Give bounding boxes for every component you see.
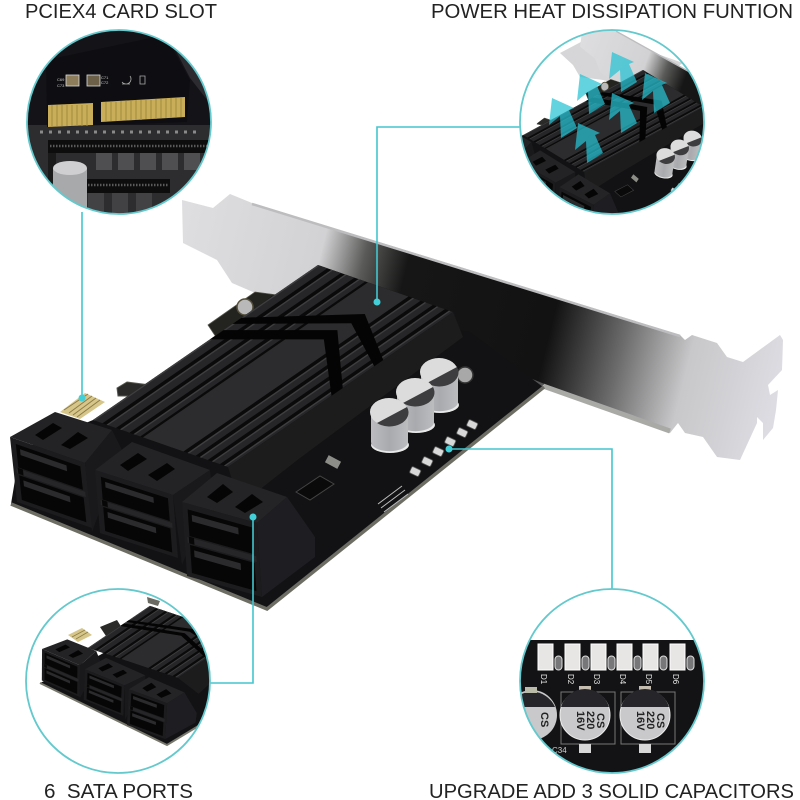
inset rear tab xyxy=(100,620,122,636)
leader line: SATA ports xyxy=(210,514,256,683)
motherboard area xyxy=(28,125,210,213)
capacitor centre: 220 xyxy=(584,711,596,729)
silver capacitor xyxy=(53,161,87,208)
inset board xyxy=(40,653,209,746)
inset circle: PCIe gold fingers xyxy=(26,29,212,215)
capacitor right: 16V xyxy=(634,711,646,731)
small board components xyxy=(296,455,408,512)
leader line: PCIe slot xyxy=(78,212,86,402)
capacitor left: CS xyxy=(538,712,550,727)
diode row D1-D6 xyxy=(538,644,694,685)
capacitor right: CS xyxy=(654,713,666,728)
heatsink xyxy=(93,265,463,505)
inset gold connector xyxy=(68,628,92,642)
LED row xyxy=(409,419,478,477)
inset top tab xyxy=(147,597,160,606)
leader line: heat dissipation xyxy=(374,127,520,306)
capacitor centre: CS xyxy=(594,713,606,728)
capacitor left xyxy=(522,687,557,738)
capacitor centre xyxy=(560,686,615,753)
upper card board xyxy=(47,125,100,127)
diode row D1-D6: D3 xyxy=(592,674,601,685)
capacitor right: 220 xyxy=(644,711,656,729)
surface components strip xyxy=(40,130,200,134)
board label: C34 xyxy=(552,746,567,755)
board mounting tab xyxy=(208,292,285,345)
heading: heat dissipation: POWER HEAT DISSIPATION FUNTION xyxy=(431,1,793,23)
SATA connector block 3 xyxy=(182,473,315,597)
bracket flange behind the card xyxy=(560,42,682,81)
PCIe slots xyxy=(48,140,213,215)
capacitor centre: 16V xyxy=(574,711,586,731)
black fins xyxy=(93,265,453,467)
diode row D1-D6: D6 xyxy=(671,674,680,685)
chip silkscreen: C72 xyxy=(101,80,109,85)
heatsink skirt xyxy=(228,312,463,505)
diode row D1-D6: D2 xyxy=(566,674,575,685)
diode row D1-D6: D1 xyxy=(539,674,548,685)
capacitor right xyxy=(620,686,675,753)
chip silkscreen: C69 xyxy=(57,77,65,82)
heading: PCIe slot: PCIEX4 CARD SLOT xyxy=(25,1,217,23)
circuit board xyxy=(11,296,544,610)
solid capacitors xyxy=(370,358,459,453)
SATA connector block 2 xyxy=(95,442,212,565)
chip silkscreen xyxy=(57,75,145,88)
white mask over connector edge xyxy=(520,117,544,131)
rear board tab xyxy=(117,382,150,396)
leader line: capacitors xyxy=(446,446,612,590)
SATA connector block 1 xyxy=(10,412,122,532)
diode row D1-D6: D4 xyxy=(618,674,627,685)
SATA connector blocks xyxy=(10,412,315,597)
inset circle: SATA ports xyxy=(25,588,211,774)
chip silkscreen: C73 xyxy=(57,83,65,88)
gold fingers xyxy=(48,97,185,127)
mounting screws xyxy=(237,299,473,383)
inset circle: solid capacitors xyxy=(519,588,705,774)
metal mounting bracket xyxy=(182,194,783,460)
chip silkscreen: C71 xyxy=(101,75,109,80)
product photo: SATA expansion card xyxy=(10,194,783,610)
inset circle: heat dissipation xyxy=(519,29,705,215)
gold edge connector xyxy=(60,393,105,419)
diode row D1-D6: D5 xyxy=(644,674,653,685)
airflow arrows xyxy=(549,52,670,163)
